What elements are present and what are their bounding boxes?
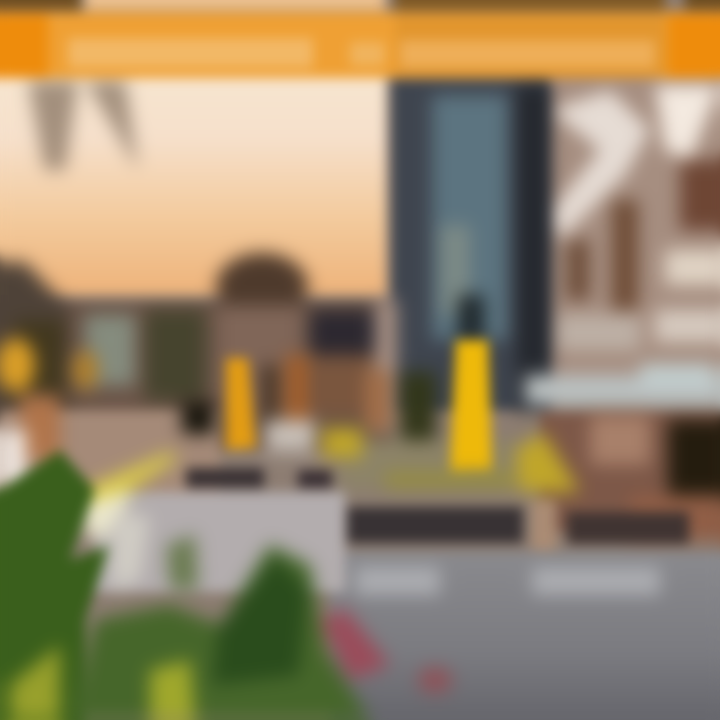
foreground green plants: [10, 515, 452, 720]
awning: [525, 364, 720, 405]
pavement: [330, 552, 720, 720]
yellow column left: [226, 358, 256, 450]
palm fronds at top left: [28, 80, 138, 170]
mid ground base: [0, 410, 220, 500]
banner title text (illegible in the blurred reference): [68, 38, 655, 68]
sky: [0, 70, 386, 295]
orange banner: [0, 12, 720, 78]
right building base: [548, 70, 720, 380]
skyline base: [0, 302, 392, 450]
central dark tower: [392, 80, 550, 410]
yellow column right: [450, 340, 492, 472]
foreground green plant base: [0, 450, 110, 720]
tower glass: [432, 85, 550, 410]
right lower warm details: [590, 415, 720, 540]
skyline details: [0, 253, 397, 430]
top edge strip: [0, 0, 720, 10]
yellow glow patches: [322, 428, 580, 492]
mid ground warm patches: [0, 338, 520, 490]
right lower warm area base: [540, 412, 720, 532]
pavement highlights: [355, 567, 660, 595]
pale ground: [95, 492, 345, 592]
yellow stripe near plants: [70, 452, 178, 540]
right building details: [548, 85, 720, 350]
dark planters: [186, 468, 689, 550]
